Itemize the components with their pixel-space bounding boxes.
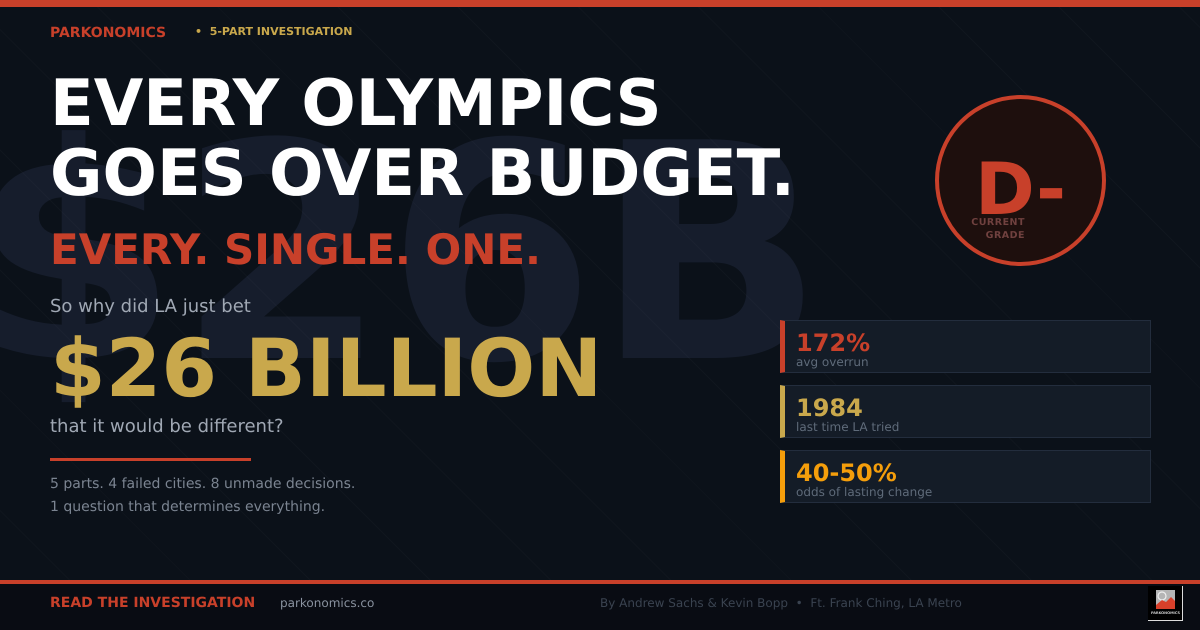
stat: last attempt [780,385,1151,438]
value: 172% [796,329,870,357]
series tag: • 5-PART INVESTIGATION [195,25,352,38]
summary text: 5 parts. 4 failed cities. 8 unmade decisions. [50,476,355,492]
label: avg overrun [796,355,869,369]
lead-in question: So why did LA just bet [50,296,251,317]
label: odds of lasting change [796,485,932,499]
footer band [0,580,1200,630]
grade caption: GRADE [986,230,1025,241]
follow-up line: that it would be different? [50,416,284,437]
headline [50,67,795,211]
credits: By Andrew Sachs & Kevin Bopp • Ft. Frank Ching, LA Metro [600,596,962,610]
divider [50,458,251,461]
grade caption [971,217,1025,241]
headline: EVERY OLYMPICS [50,67,662,141]
label: last time LA tried [796,420,899,434]
summary text: 1 question that determines everything. [50,499,325,515]
logo chart icon [1156,590,1175,609]
subheadline: EVERY. SINGLE. ONE. [50,225,541,274]
grade letter: D- [975,147,1066,231]
stat: odds [780,450,1151,503]
big figure: $26 BILLION [50,322,602,415]
top accent bar [0,0,1200,7]
headline: GOES OVER BUDGET. [50,137,795,211]
brand name: PARKONOMICS [50,25,166,41]
logo wordmark: PARKONOMICS [1151,611,1180,615]
grade caption: CURRENT [971,217,1025,228]
summary text [50,476,355,515]
website: parkonomics.co [280,596,374,610]
call to action: READ THE INVESTIGATION [50,595,255,611]
value: 1984 [796,394,863,422]
value: 40-50% [796,459,897,487]
stat: average overrun [780,320,1151,373]
grade badge [935,95,1106,266]
logo [1148,586,1183,621]
